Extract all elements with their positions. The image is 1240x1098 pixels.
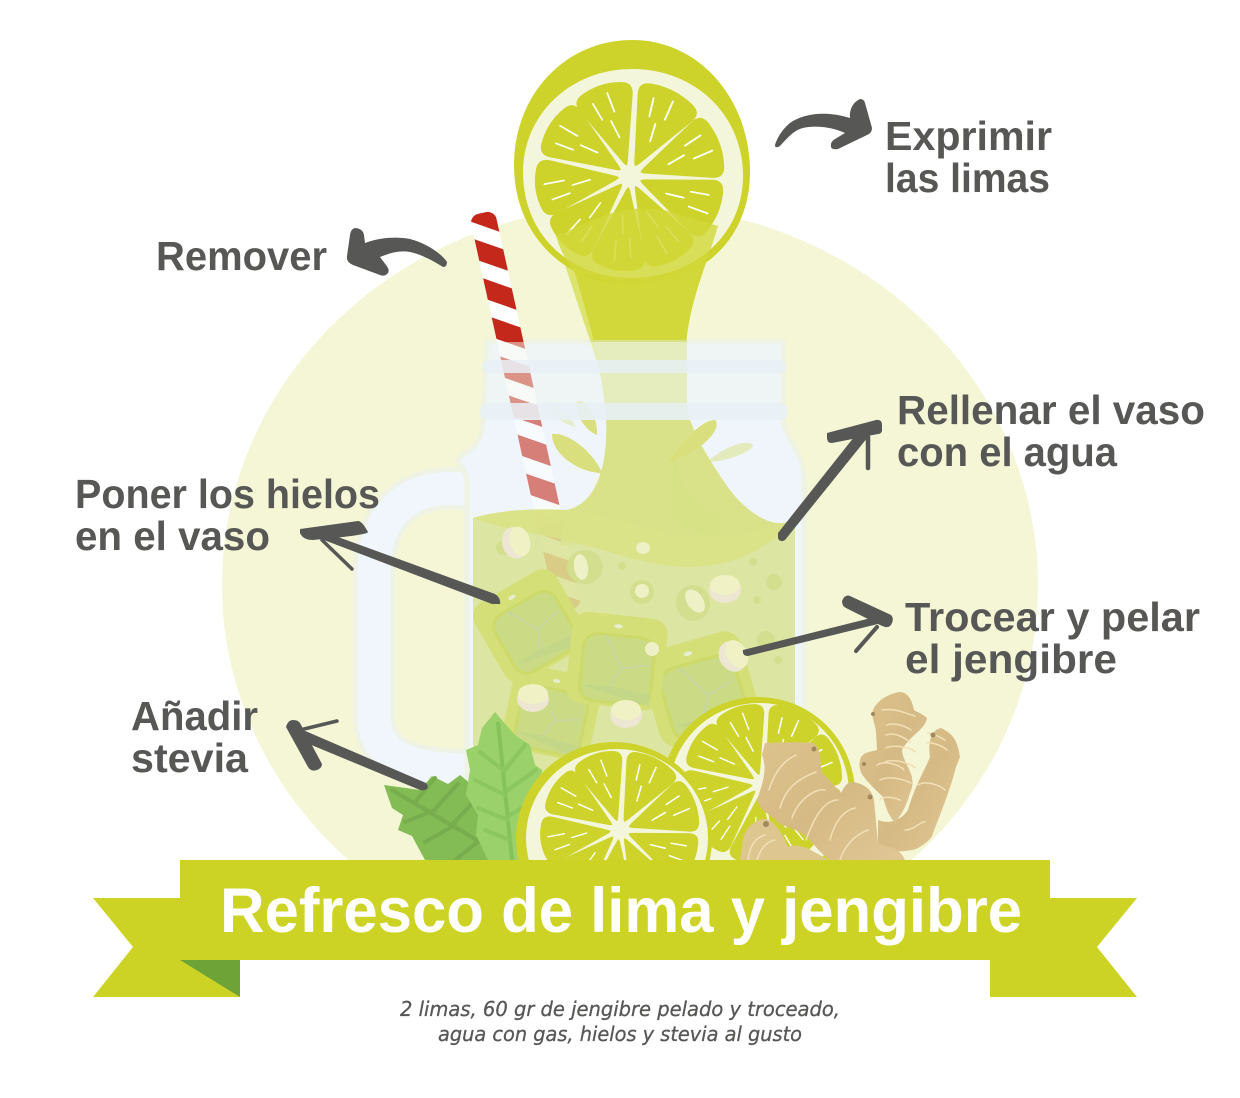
ginger: lower left knob <box>740 819 828 860</box>
banner <box>93 860 1137 997</box>
straw <box>471 212 580 608</box>
jar glass body <box>458 342 804 860</box>
lime segments <box>532 76 730 274</box>
ginger: right branch <box>878 728 960 851</box>
label: jengibre: Trocear y pelar <box>905 594 1200 640</box>
label: exprimir: Exprimir <box>885 113 1052 159</box>
leaf: dark mint <box>384 775 530 860</box>
ingredients note <box>400 997 840 1046</box>
label: stevia <box>131 693 258 781</box>
banner right tail <box>990 898 1137 997</box>
label: stevia: Añadir <box>131 693 258 739</box>
arrow: stevia <box>286 720 428 790</box>
arrow: hielos <box>300 521 500 604</box>
label: rellenar: Rellenar el vaso <box>897 387 1205 433</box>
label: jengibre <box>905 594 1200 682</box>
label: jengibre: el jengibre <box>905 636 1117 682</box>
juice stream below lime <box>556 226 718 372</box>
label: remover: Remover <box>156 233 327 279</box>
label: stevia: stevia <box>131 735 249 781</box>
ginger root <box>740 692 960 860</box>
leaf: light mint <box>466 712 542 860</box>
label: rellenar <box>897 387 1205 475</box>
stream shadow <box>673 415 721 540</box>
arrow: jengibre <box>743 596 893 656</box>
arrow: remover <box>347 228 447 276</box>
front lime slice <box>516 742 712 936</box>
label: exprimir <box>885 113 1052 201</box>
label: exprimir: las limas <box>885 155 1050 201</box>
juice over lime <box>556 208 718 292</box>
label: hielos: Poner los hielos <box>75 471 380 517</box>
top lime <box>514 40 750 285</box>
juice stream inside jar <box>560 340 787 545</box>
arrow: exprimir <box>775 99 872 149</box>
lime pith <box>523 69 743 278</box>
banner fold <box>180 960 240 997</box>
bubbles and ginger pieces <box>496 523 782 728</box>
banner main strip <box>180 860 1050 960</box>
arrow: rellenar <box>778 420 882 541</box>
lime rind <box>514 40 750 285</box>
jar neck and rings <box>480 342 788 420</box>
ingredients note: agua con gas, hielos y stevia al gusto <box>438 1022 802 1046</box>
ice cubes <box>467 563 764 764</box>
label: rellenar: con el agua <box>897 429 1118 475</box>
ginger: tall branch <box>859 692 927 823</box>
ginger lines <box>748 710 947 860</box>
background circle <box>222 218 1038 860</box>
banner left tail <box>93 898 240 997</box>
back lime slice <box>661 697 855 891</box>
ginger: main body <box>757 742 905 860</box>
liquid surface <box>473 509 787 567</box>
title: Refresco de lima y jengibre <box>220 876 1022 946</box>
glass tint over straw <box>500 418 570 525</box>
juice droplets <box>551 402 753 473</box>
label: hielos <box>75 471 380 559</box>
label: hielos: en el vaso <box>75 513 270 559</box>
ingredients note: 2 limas, 60 gr de jengibre pelado y troceado, <box>400 997 840 1021</box>
jar handle <box>374 488 480 770</box>
liquid in jar <box>473 509 795 860</box>
